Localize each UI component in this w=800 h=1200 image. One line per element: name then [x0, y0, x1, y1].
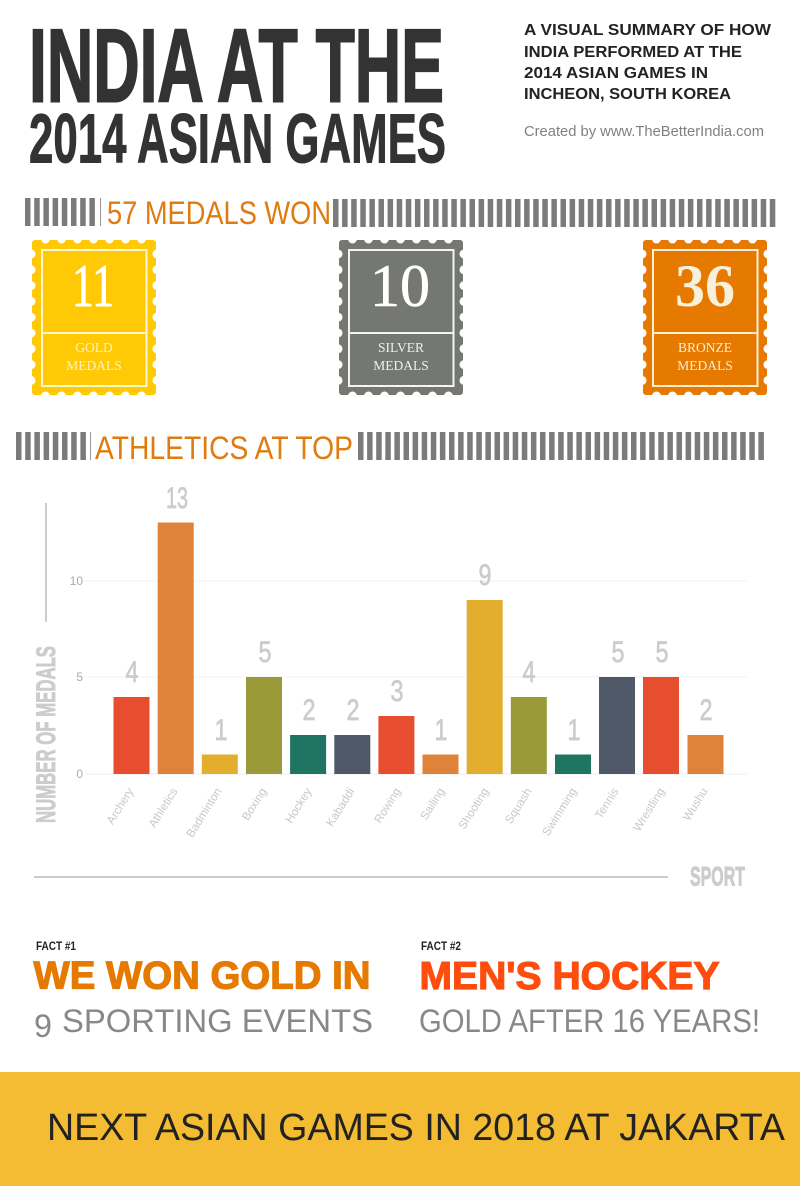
sport labels: Squash	[503, 786, 535, 826]
stamp: gold medals: MEDALS	[66, 358, 122, 373]
fact 2: GOLD AFTER 16 YEARS!	[419, 1003, 760, 1039]
fact 1: WE WON GOLD IN	[34, 954, 370, 998]
bar value labels: 2	[700, 694, 712, 727]
stamp: silver medals	[338, 239, 464, 396]
fact 2	[419, 939, 760, 1039]
bar chart: medals by sport	[31, 482, 747, 892]
sport labels: Hockey	[283, 786, 315, 826]
title	[29, 8, 446, 178]
y axis tick labels: 0	[76, 767, 83, 781]
sport labels: Swimming	[540, 786, 580, 838]
sport labels: Archery	[104, 786, 137, 827]
x axis title: SPORT	[690, 862, 745, 892]
sport labels: Wushu	[680, 786, 711, 823]
banner: NEXT ASIAN GAMES IN 2018 AT JAKARTA	[47, 1107, 786, 1149]
fact 1: FACT #1	[36, 939, 76, 953]
bar value labels: 4	[522, 656, 536, 689]
stamp: bronze medals: BRONZE	[678, 340, 732, 355]
summary text	[524, 22, 771, 103]
bar value labels: 1	[214, 714, 228, 747]
stamp: bronze medals	[642, 239, 768, 396]
title: INDIA AT THE	[29, 8, 444, 124]
summary text: INCHEON, SOUTH KOREA	[524, 86, 731, 103]
title: 2014 ASIAN GAMES	[29, 100, 446, 178]
fact 1: 9	[34, 1008, 52, 1044]
sport labels: Boxing	[240, 786, 270, 823]
fact 2: MEN'S HOCKEY	[420, 955, 720, 998]
stamp: gold medals: GOLD	[75, 340, 113, 355]
heading: athletics at top: ATHLETICS AT TOP	[95, 430, 353, 466]
sport labels: Badminton	[184, 786, 225, 840]
sport labels: Shooting	[456, 786, 492, 832]
sport labels: Rowing	[372, 786, 404, 826]
stamp: silver medals: SILVER	[378, 340, 424, 355]
credit line: Created by www.TheBetterIndia.com	[524, 123, 764, 140]
bar value labels: 9	[478, 559, 492, 592]
banner	[0, 1072, 800, 1186]
stamp: bronze medals: MEDALS	[677, 358, 733, 373]
stamp: bronze medals: 36	[675, 253, 735, 319]
y axis tick labels: 10	[70, 574, 83, 588]
sport labels: Wrestling	[631, 786, 668, 834]
summary text: INDIA PERFORMED AT THE	[524, 44, 742, 61]
fact 1: SPORTING EVENTS	[62, 1003, 373, 1039]
bar value labels: 4	[126, 656, 138, 689]
y axis title: NUMBER OF MEDALS	[31, 646, 61, 823]
fact 1	[34, 939, 373, 1044]
y axis tick labels: 5	[76, 670, 83, 684]
heading: 57 medals won: 57 MEDALS WON	[107, 195, 331, 231]
stamp: silver medals: 10	[370, 253, 430, 319]
bar value labels	[126, 482, 712, 747]
summary text: A VISUAL SUMMARY OF HOW	[524, 22, 771, 39]
y axis tick labels	[70, 574, 83, 781]
bars	[114, 522, 724, 774]
bar value labels: 3	[390, 675, 404, 708]
fact 2: FACT #2	[421, 939, 461, 953]
sport labels: Tennis	[593, 786, 622, 821]
stamp: gold medals	[31, 239, 157, 396]
bar value labels: 2	[346, 694, 360, 727]
stamp: silver medals: MEDALS	[373, 358, 429, 373]
bar value labels: 5	[656, 636, 668, 669]
bar value labels: 13	[166, 482, 188, 515]
bar value labels: 5	[612, 636, 624, 669]
sport labels	[104, 786, 711, 840]
bar value labels: 1	[568, 714, 580, 747]
summary text: 2014 ASIAN GAMES IN	[524, 65, 708, 82]
stamp: gold medals: 11	[72, 253, 114, 319]
bar value labels: 2	[302, 694, 316, 727]
sport labels: Sailing	[418, 786, 448, 822]
sport labels: Kabaddi	[324, 786, 358, 829]
bar value labels: 1	[434, 714, 448, 747]
bar value labels: 5	[258, 636, 272, 669]
sport labels: Athletics	[146, 786, 181, 830]
